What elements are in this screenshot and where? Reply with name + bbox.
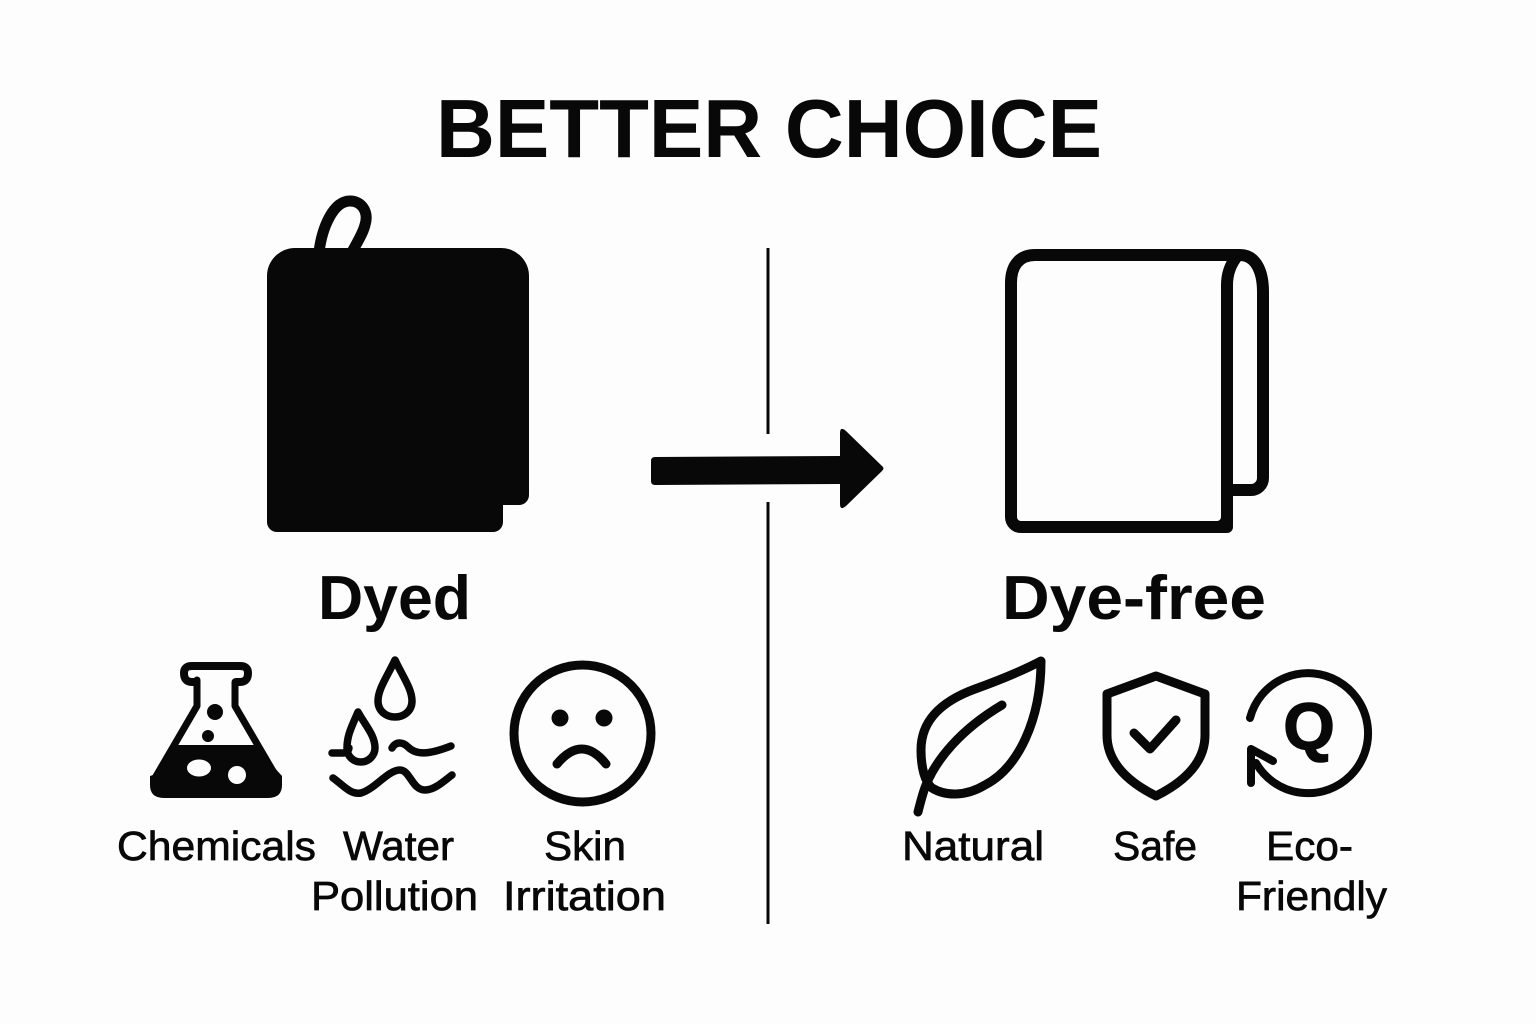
label: Water Pollution: Pollution (311, 873, 478, 919)
label: Skin Irritation: Skin (544, 823, 626, 869)
icon: sad face (514, 665, 651, 802)
label: Eco-Friendly: Eco- (1266, 823, 1353, 869)
heading: Dyed: Dyed (318, 564, 471, 633)
label: Water Pollution: Water (343, 823, 454, 869)
panel: dye-free (902, 255, 1388, 919)
icon: safety shield (1107, 676, 1205, 796)
label: Chemicals: Chemicals (117, 823, 316, 869)
label: Eco-Friendly: Friendly (1236, 873, 1388, 919)
title: BETTER CHOICE (436, 82, 1102, 175)
icon: dyed black towel (267, 201, 529, 532)
icon: dye-free folded towel (1011, 255, 1263, 527)
label: Eco-Friendly (1236, 823, 1388, 919)
divider line (766, 248, 770, 924)
label: Skin Irritation: Irritation (503, 873, 666, 919)
panel: dyed (117, 201, 666, 919)
icon: chemical flask (150, 666, 282, 798)
label: Natural: Natural (902, 823, 1044, 869)
label: Safe: Safe (1113, 823, 1197, 869)
label: Skin Irritation (503, 823, 666, 919)
heading: Dye-free: Dye-free (1002, 564, 1266, 633)
arrow: dyed to dye-free (651, 429, 884, 508)
icon: eco recycle arrows: Q (1283, 689, 1335, 763)
label: Water Pollution (311, 823, 478, 919)
icon: leaf (918, 661, 1041, 812)
icon: eco recycle arrows (1250, 673, 1368, 793)
icon: water pollution (332, 660, 452, 793)
